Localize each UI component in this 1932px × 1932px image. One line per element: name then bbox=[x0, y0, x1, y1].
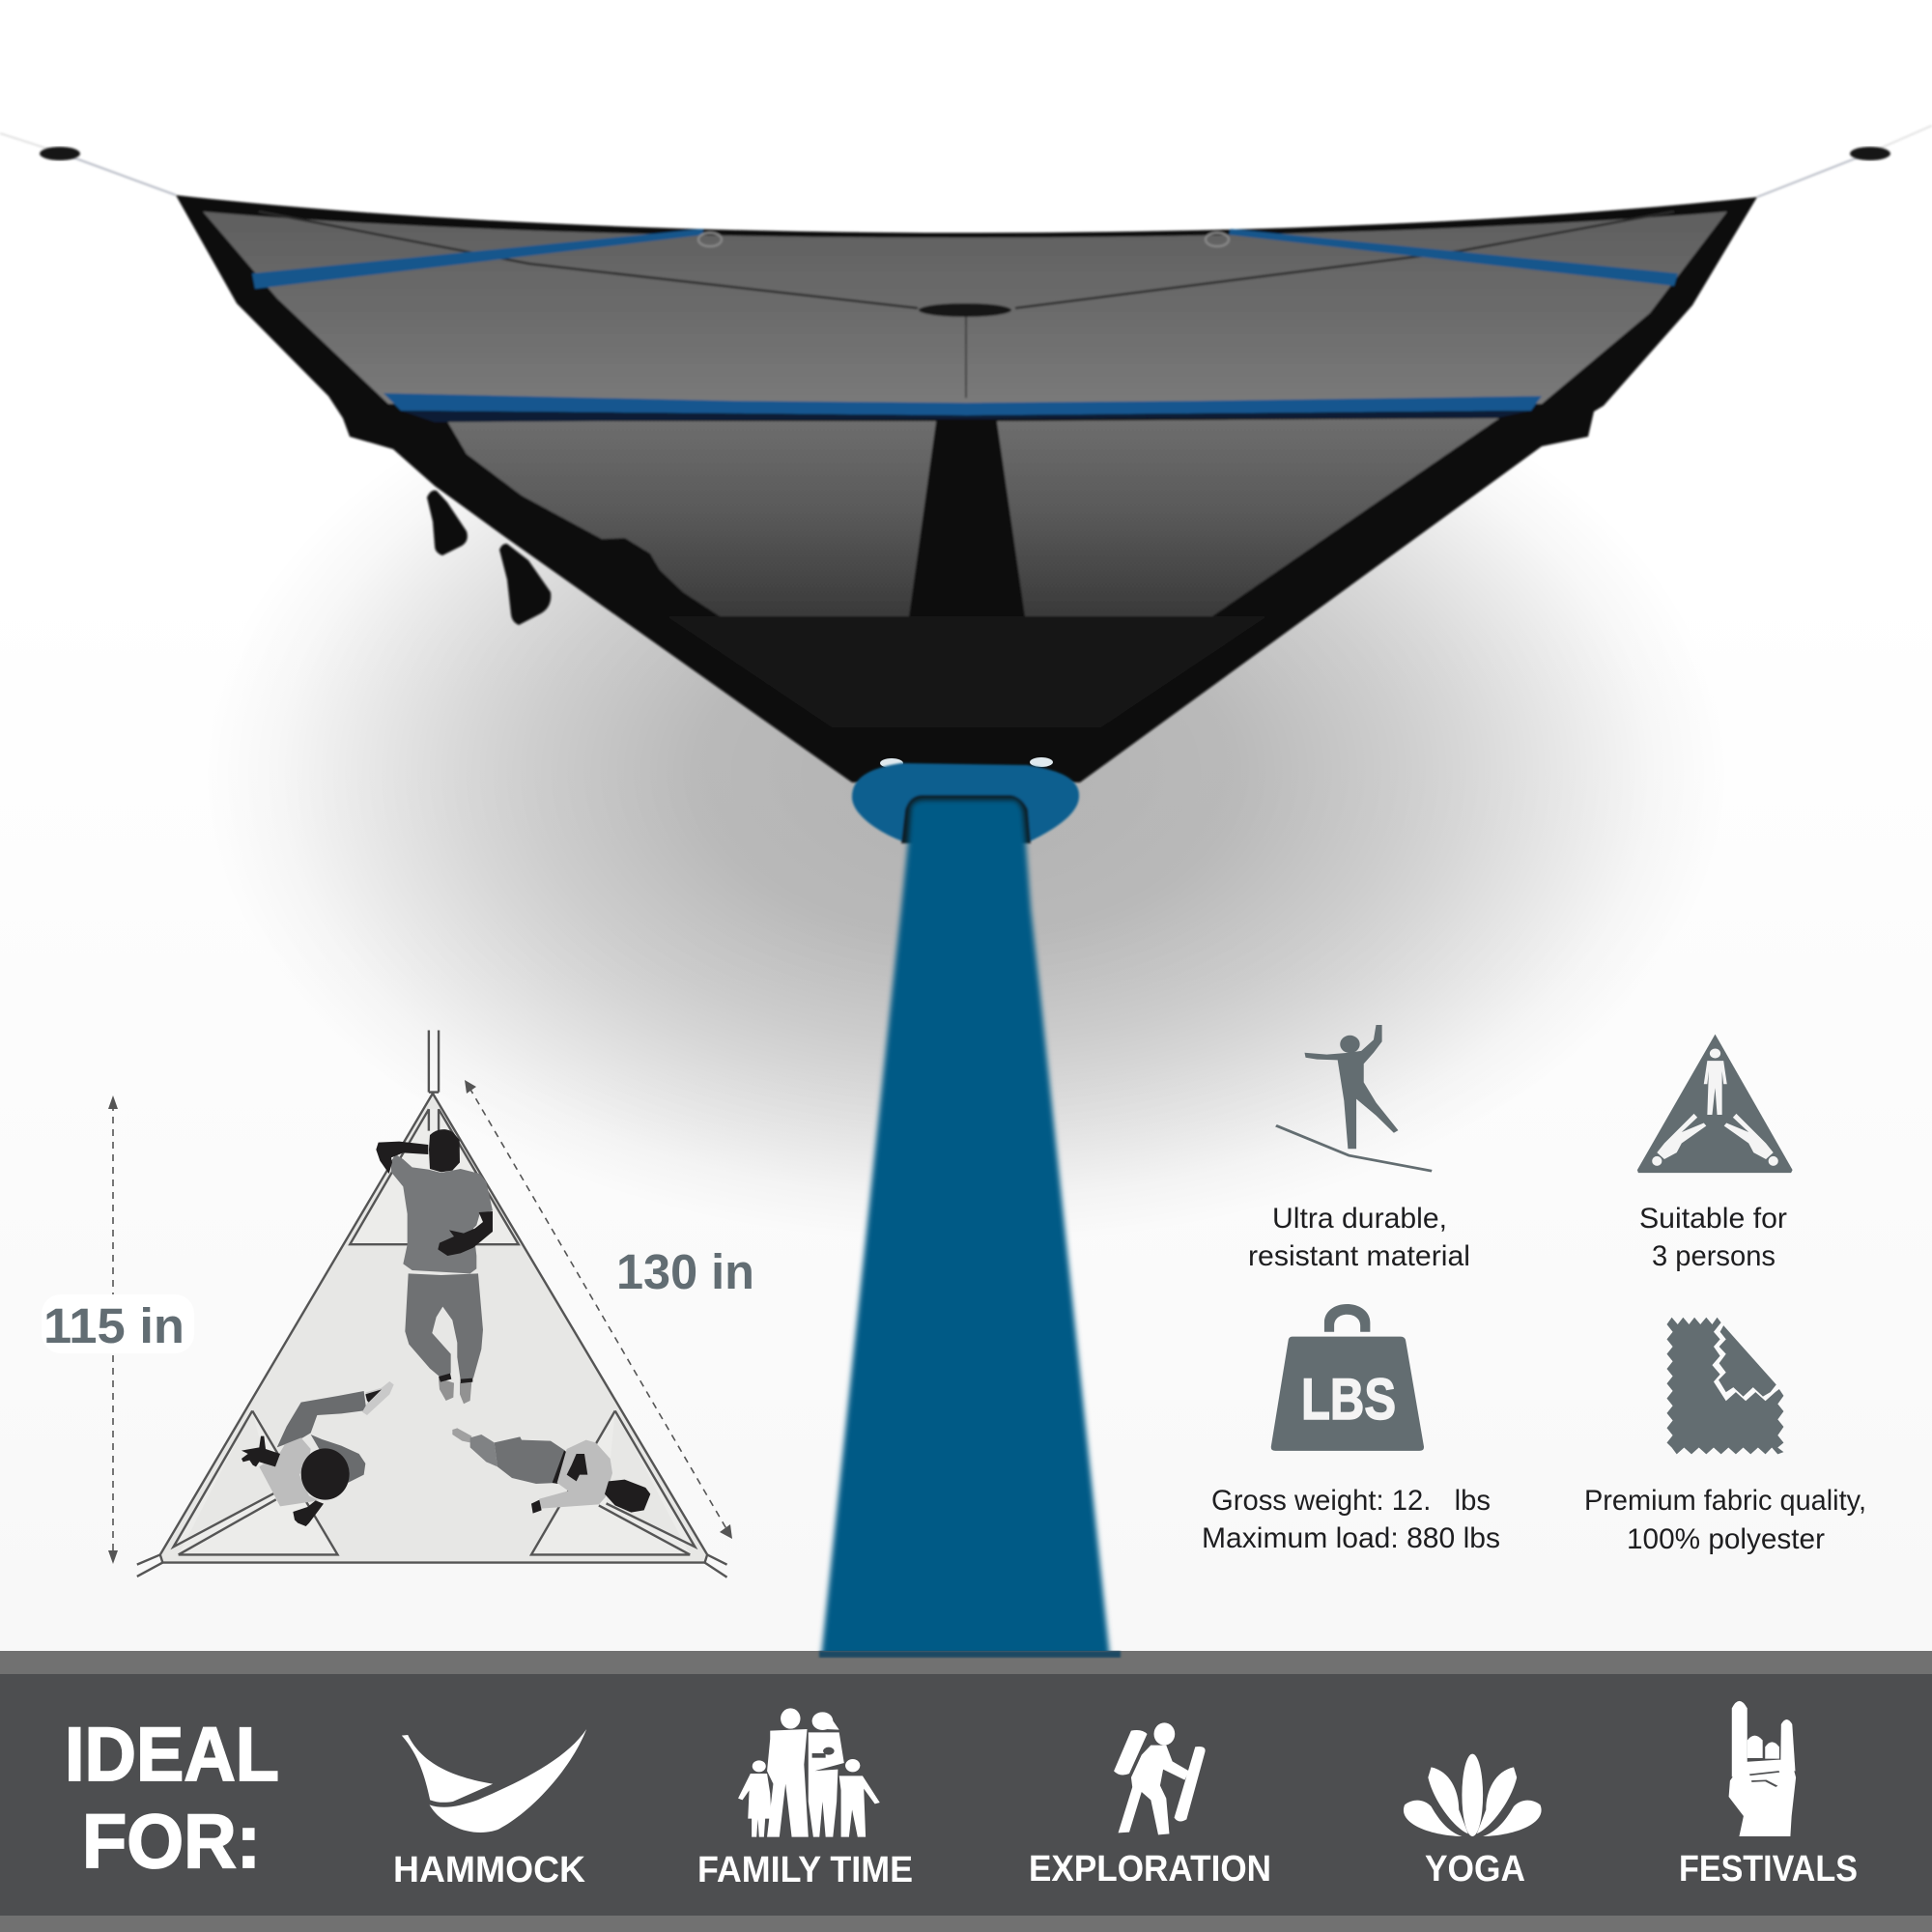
feature: ultra durable bbox=[1248, 1025, 1470, 1272]
hammock body bbox=[176, 195, 1757, 782]
icon: left rope grommet bbox=[40, 147, 80, 160]
heading: ideal for bbox=[65, 1711, 279, 1884]
band inner bbox=[0, 1674, 1932, 1916]
icon: weight bbox=[1271, 1304, 1424, 1451]
label: yoga: YOGA bbox=[1425, 1849, 1525, 1889]
label: hammock: HAMMOCK bbox=[393, 1850, 586, 1890]
icon: family bbox=[738, 1708, 880, 1837]
icon: hammock bbox=[402, 1729, 586, 1833]
item: festivals bbox=[1679, 1701, 1858, 1889]
strap overlap bbox=[819, 1651, 1121, 1658]
icon: lotus bbox=[1404, 1754, 1542, 1836]
metal rings bbox=[698, 233, 1229, 246]
person one bbox=[376, 1129, 493, 1404]
icon: rock hand bbox=[1729, 1701, 1796, 1836]
upper mesh panel bbox=[203, 212, 1727, 404]
spreader bar middle bbox=[384, 393, 1542, 422]
label: festivals: FESTIVALS bbox=[1679, 1849, 1858, 1889]
white screws bbox=[880, 757, 1053, 768]
central support lines bbox=[259, 212, 1674, 398]
lower black panel bbox=[667, 616, 1267, 727]
text: suitable for: 3 persons bbox=[1652, 1240, 1776, 1272]
dimension arrow: height bbox=[108, 1095, 118, 1564]
heading: ideal for: IDEAL bbox=[65, 1711, 279, 1797]
feature: fabric bbox=[1584, 1318, 1866, 1555]
icon: fabric swatch bbox=[1667, 1318, 1783, 1454]
text: fabric bbox=[1584, 1485, 1866, 1555]
text: ultra durable: resistant material bbox=[1248, 1240, 1470, 1272]
blue strap mount bbox=[852, 763, 1079, 843]
triangle outline bbox=[137, 1031, 727, 1577]
bottom band bbox=[0, 1651, 1932, 1932]
text: weight: Maximum load: 880 lbs bbox=[1202, 1522, 1500, 1554]
hanging ropes bbox=[0, 126, 1932, 197]
text: weight: Gross weight: 12. lbs bbox=[1211, 1485, 1491, 1517]
label: family time: FAMILY TIME bbox=[697, 1850, 913, 1890]
label: exploration: EXPLORATION bbox=[1029, 1849, 1271, 1889]
person three bbox=[452, 1428, 650, 1514]
lower mesh panel left bbox=[447, 421, 936, 616]
hammock cast shadow bbox=[193, 290, 1739, 1256]
label halo bbox=[42, 1294, 194, 1353]
strap tab 1 bbox=[427, 491, 468, 555]
text: ultra durable: Ultra durable, bbox=[1272, 1203, 1447, 1235]
text: ultra durable bbox=[1248, 1203, 1470, 1272]
diagram: hammock top view with three people bbox=[42, 1031, 754, 1577]
icon: triangle with persons bbox=[1637, 1035, 1793, 1173]
band outer strip bbox=[0, 1651, 1932, 1932]
text: fabric: 100% polyester bbox=[1627, 1523, 1825, 1555]
icon: right rope grommet bbox=[1850, 147, 1890, 160]
item: yoga bbox=[1404, 1754, 1542, 1889]
item: exploration bbox=[1029, 1722, 1271, 1889]
text: suitable for bbox=[1639, 1203, 1787, 1272]
text: weight bbox=[1202, 1485, 1500, 1554]
dimension arrow: side bbox=[465, 1080, 732, 1539]
heading: ideal for: FOR: bbox=[82, 1798, 261, 1884]
lower mesh panel right bbox=[997, 418, 1499, 616]
item: family time bbox=[697, 1708, 913, 1890]
text: suitable for: Suitable for bbox=[1639, 1203, 1787, 1235]
icon: slackline walker bbox=[1276, 1025, 1432, 1171]
mesh weave texture bbox=[447, 418, 1499, 616]
person two bbox=[242, 1381, 394, 1526]
spreader bar left bbox=[252, 229, 704, 289]
feature: weight bbox=[1202, 1304, 1500, 1554]
label: height: 115 in bbox=[43, 1298, 185, 1353]
icon: weight: LBS bbox=[1301, 1367, 1396, 1432]
centre ring bbox=[919, 303, 1011, 317]
blue strap bbox=[821, 800, 1110, 1658]
text: fabric: Premium fabric quality, bbox=[1584, 1485, 1866, 1517]
strap tab 2 bbox=[499, 544, 551, 625]
hammock black frame bbox=[176, 195, 1757, 782]
icon: hiker bbox=[1114, 1722, 1206, 1834]
spreader bar right bbox=[1229, 229, 1678, 286]
feature: three persons bbox=[1637, 1035, 1793, 1272]
item: hammock bbox=[393, 1729, 586, 1890]
label: side length: 130 in bbox=[616, 1244, 754, 1299]
